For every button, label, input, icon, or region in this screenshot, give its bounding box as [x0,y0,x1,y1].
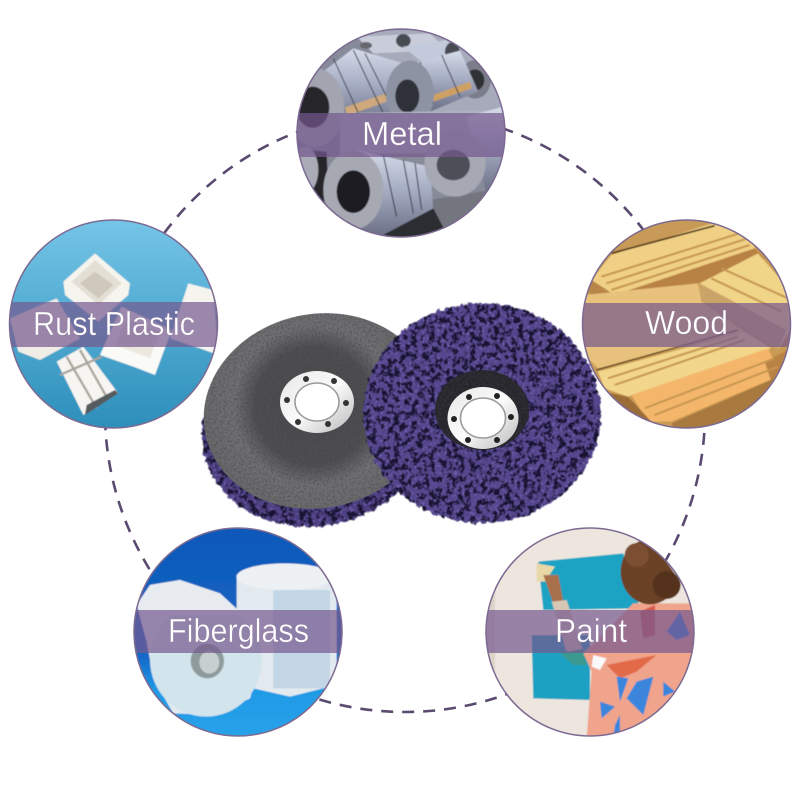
panel: metal [296,28,506,238]
dashed connector ring [105,112,705,712]
label: Wood [645,304,728,341]
dark centre recess [435,370,529,450]
left washer [280,371,354,433]
product: grey back abrasive disc [183,292,451,548]
photo: fiberglass rolls [134,528,342,736]
label band [297,113,505,157]
circle outline [134,528,342,736]
panel: fiberglass [130,525,350,745]
label band [583,303,791,347]
label: Paint [555,612,627,649]
panel: rust plastic [8,219,218,429]
label band [134,610,342,653]
label band [486,610,694,653]
grey backing plate [185,292,451,530]
label: Fiberglass [168,612,309,649]
photo: white plastic caps [10,220,217,428]
purple rim of left disc [183,310,449,548]
product: purple strip disc [363,303,601,523]
panel: paint [480,525,700,745]
label: Metal [362,115,442,152]
panel: wood [578,215,798,435]
photo: person painting wall [487,528,694,736]
circle outline [10,220,218,428]
label: Rust Plastic [33,305,195,342]
purple abrasive face [363,303,601,523]
photo: steel coils [298,30,504,236]
label band [10,302,218,347]
photo: timber boards [583,220,790,428]
right washer [448,387,518,449]
circle outline [486,528,694,736]
circle outline [297,29,505,237]
circle outline [582,220,790,428]
